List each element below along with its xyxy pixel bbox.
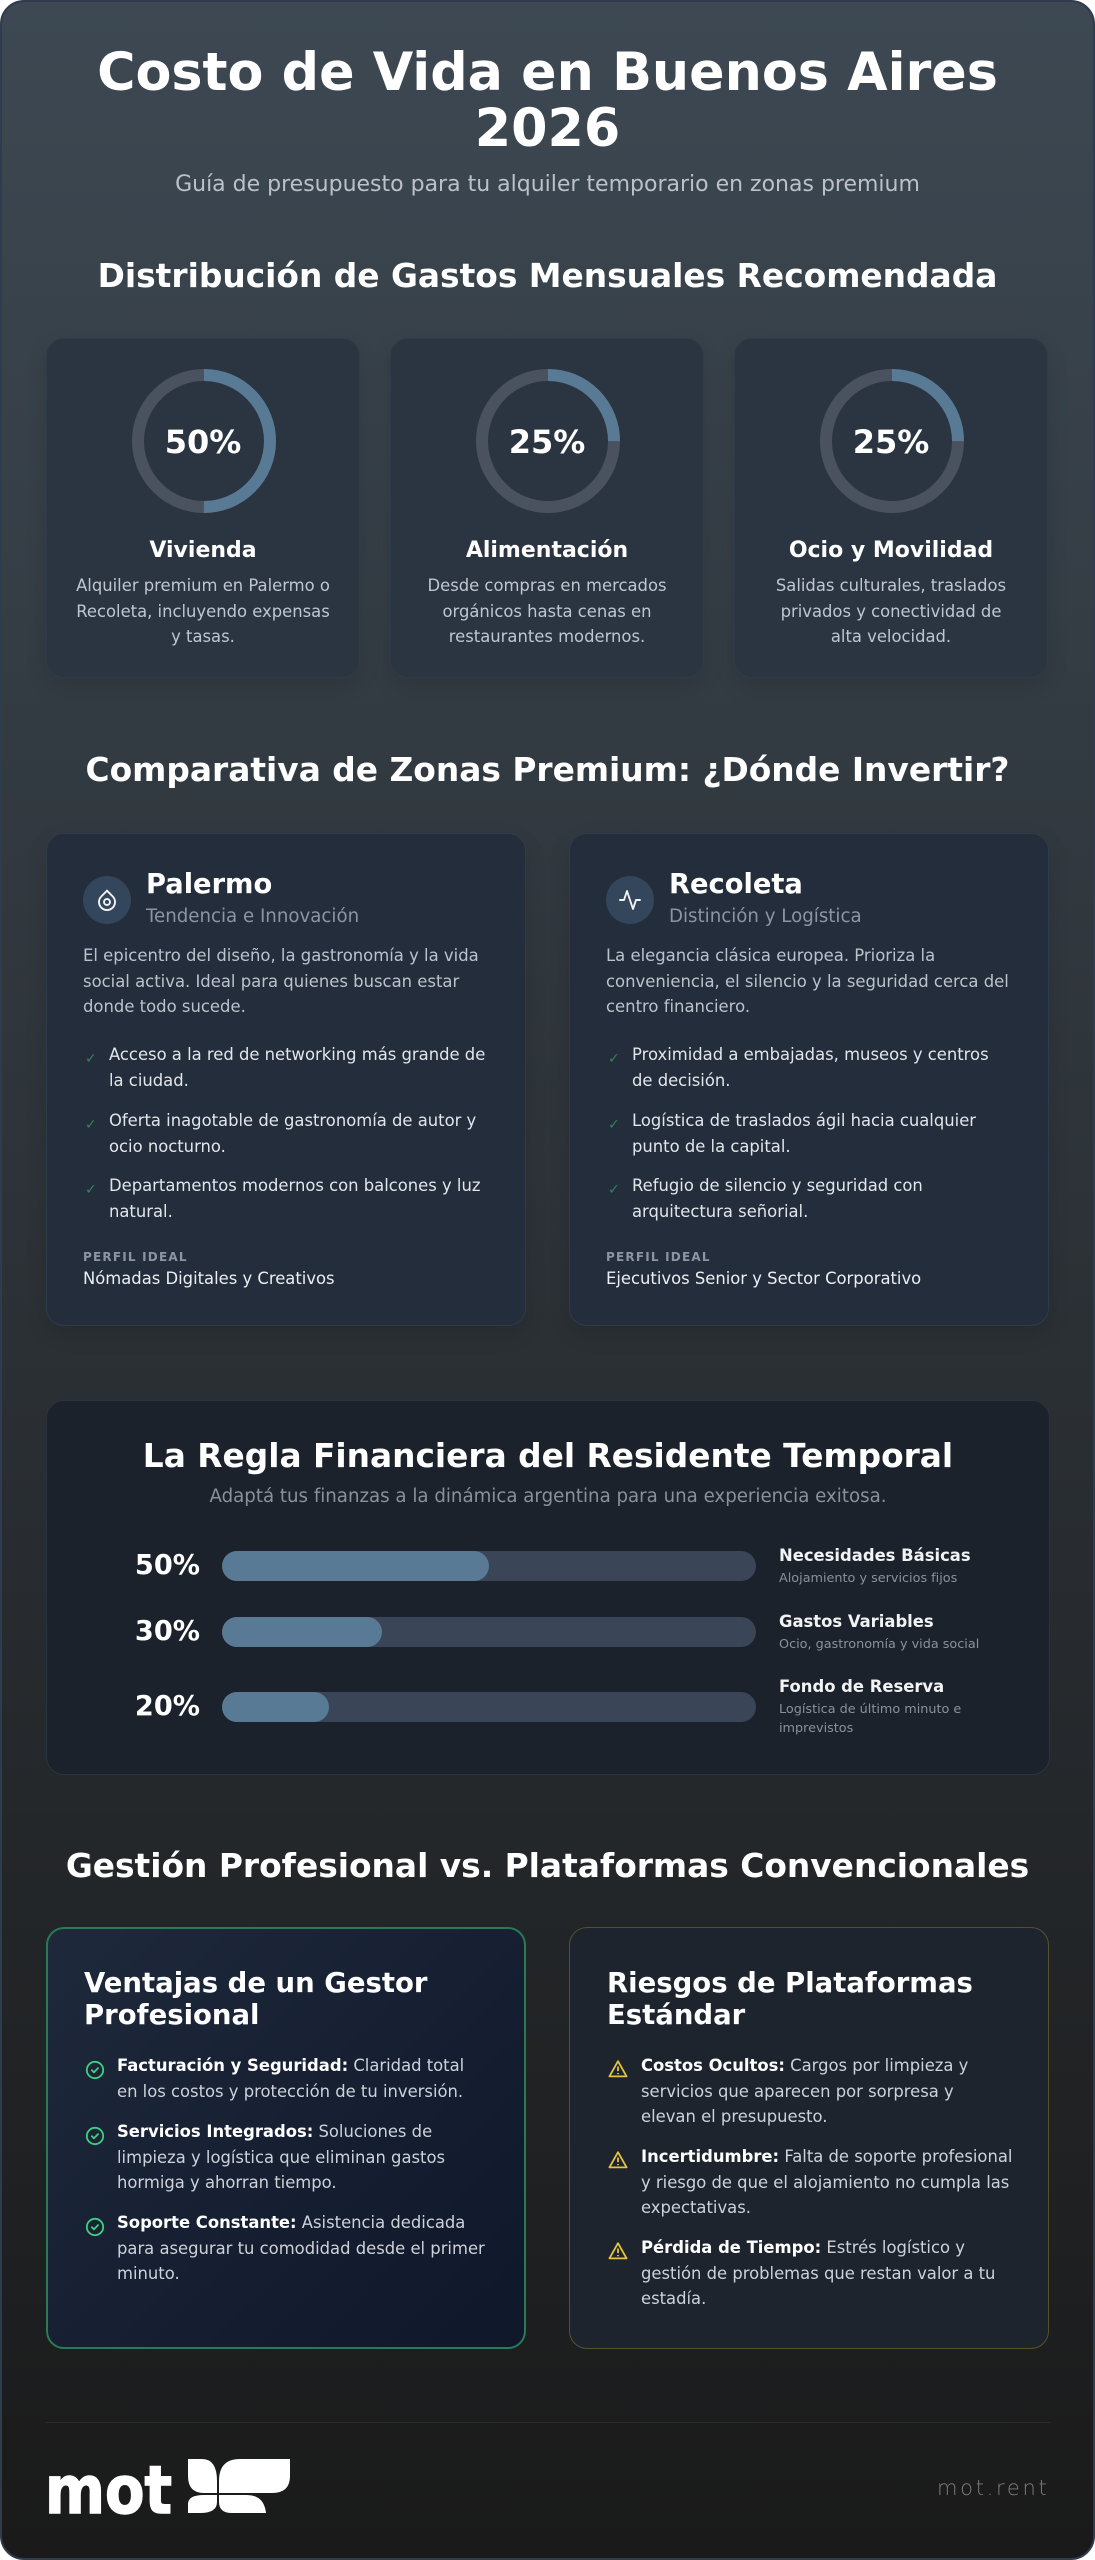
icon: check circle 2 <box>86 2126 104 2146</box>
item: incertidumbre <box>641 2147 1012 2217</box>
zone description <box>606 946 1009 1016</box>
donut chart: 25% <box>820 369 964 513</box>
panel: regla financiera <box>46 1400 1050 1775</box>
value: 25%: 25% <box>853 423 929 461</box>
check item 3: Departamentos modernos con balcones y luz <box>109 1176 480 1195</box>
icon: warning 2 <box>608 2151 628 2168</box>
item: costos ocultos: elevan el presupuesto. <box>641 2107 828 2126</box>
check item 2: Oferta inagotable de gastronomía de autor y <box>109 1111 476 1130</box>
item: soporte: minuto. <box>117 2264 180 2283</box>
bar label: fondo de reserva: Fondo de Reserva <box>779 1677 944 1696</box>
title: 2026 <box>475 98 620 159</box>
panel: ocio y movilidad <box>734 338 1048 678</box>
check item 1 <box>632 1045 989 1090</box>
zone description: centro financiero. <box>606 997 750 1016</box>
card description: privados y conectividad de <box>781 602 1001 621</box>
item: servicios: limpieza y logística que eliminan gastos <box>117 2148 445 2167</box>
ideal profile label: PERFIL IDEAL <box>606 1250 711 1264</box>
ideal profile value: Nómadas Digitales y Creativos <box>83 1269 335 1288</box>
heading: gestión profesional: Gestión Profesional vs. Plataformas Convencionales <box>66 1847 1029 1885</box>
item: facturación <box>117 2056 464 2101</box>
check item 1: Proximidad a embajadas, museos y centros <box>632 1045 989 1064</box>
card description <box>76 576 330 646</box>
zone description: conveniencia, el silencio y la seguridad cerca del <box>606 972 1009 991</box>
panel heading: La Regla Financiera del Residente Temporal <box>143 1437 953 1475</box>
item: incertidumbre: y riesgo de que el alojamiento no cumpla las <box>641 2173 1009 2192</box>
check item 2: punto de la capital. <box>632 1137 791 1156</box>
card description: Alquiler premium en Palermo o <box>76 576 330 595</box>
card description: y tasas. <box>171 627 235 646</box>
panel: ventajas <box>46 1927 526 2349</box>
card description: alta velocidad. <box>831 627 951 646</box>
panel: vivienda <box>46 338 360 678</box>
check item 3: natural. <box>109 1202 173 1221</box>
panel heading <box>607 1967 973 2031</box>
value: 25%: 25% <box>509 423 585 461</box>
check icon 1: ✓ <box>85 1051 97 1067</box>
check item 3 <box>109 1176 480 1221</box>
check item 3: Refugio de silencio y seguridad con <box>632 1176 923 1195</box>
check item 1: la ciudad. <box>109 1071 189 1090</box>
footer url: mot.rent <box>937 2476 1049 2500</box>
check icon 1: ✓ <box>608 1051 620 1067</box>
panel heading: Profesional <box>84 1999 259 2031</box>
zone name: Recoleta <box>669 869 803 900</box>
ideal profile value: Ejecutivos Senior y Sector Corporativo <box>606 1269 921 1288</box>
percent 20: 20% <box>135 1691 200 1722</box>
card description: orgánicos hasta cenas en <box>442 602 652 621</box>
card description: Desde compras en mercados <box>427 576 667 595</box>
item: pérdida de tiempo <box>641 2238 995 2308</box>
card name: Vivienda <box>149 538 257 563</box>
ideal profile label: PERFIL IDEAL <box>83 1250 188 1264</box>
title: Costo de Vida en Buenos Aires <box>97 42 998 103</box>
check item 3: arquitectura señorial. <box>632 1202 808 1221</box>
card description <box>776 576 1006 646</box>
item: pérdida de tiempo: Pérdida de Tiempo: Estrés logístico y <box>641 2238 965 2257</box>
icon: warning 1 <box>608 2060 628 2078</box>
item: servicios <box>117 2122 445 2192</box>
heading: distribución de gastos: Distribución de Gastos Mensuales Recomendada <box>98 257 997 295</box>
check item 2 <box>632 1111 976 1156</box>
icon: check circle 3 <box>86 2218 104 2236</box>
icon: warning 3 <box>608 2242 628 2260</box>
item: costos ocultos: servicios que aparecen por sorpresa y <box>641 2082 954 2101</box>
icon: check circle 1 <box>86 2060 104 2080</box>
bar: 30% <box>222 1617 756 1647</box>
check item 1: Acceso a la red de networking más grande de <box>109 1045 485 1064</box>
panel heading <box>84 1967 428 2031</box>
heading: comparativa de zonas: Comparativa de Zonas Premium: ¿Dónde Invertir? <box>86 751 1009 789</box>
item: incertidumbre: Incertidumbre: Falta de soporte profesional <box>641 2147 1012 2166</box>
check icon 3: ✓ <box>608 1182 620 1198</box>
card description: Salidas culturales, traslados <box>776 576 1006 595</box>
panel: recoleta <box>569 833 1049 1326</box>
percent 50: 50% <box>135 1550 200 1581</box>
bar label: necesidades básicas: Necesidades Básicas <box>779 1546 971 1565</box>
panel: alimentación <box>390 338 704 678</box>
bar note: imprevistos <box>779 1721 853 1736</box>
card description: restaurantes modernos. <box>449 627 645 646</box>
value: 50%: 50% <box>165 423 241 461</box>
item: soporte <box>117 2213 485 2283</box>
item: pérdida de tiempo: gestión de problemas que restan valor a tu <box>641 2264 995 2283</box>
bar label: gastos variables: Gastos Variables <box>779 1612 934 1631</box>
card name: Ocio y Movilidad <box>789 538 993 563</box>
zone description: La elegancia clásica europea. Prioriza la <box>606 946 935 965</box>
zone description: El epicentro del diseño, la gastronomía y la vida <box>83 946 479 965</box>
check item 2: ocio nocturno. <box>109 1137 226 1156</box>
zone description <box>83 946 479 1016</box>
bar: 20% <box>222 1692 756 1722</box>
check item 2 <box>109 1111 476 1156</box>
zone description: social activa. Ideal para quienes buscan estar <box>83 972 459 991</box>
icon: droplet <box>83 876 131 924</box>
panel subtitle: Adaptá tus finanzas a la dinámica argentina para una experiencia exitosa. <box>209 1486 887 1507</box>
icon: activity pulse <box>606 876 654 924</box>
item: servicios: hormiga y ahorran tiempo. <box>117 2173 337 2192</box>
card description: Recoleta, incluyendo expensas <box>76 602 330 621</box>
check icon 2: ✓ <box>85 1117 97 1133</box>
item: costos ocultos <box>641 2056 968 2126</box>
item: soporte: para asegurar tu comodidad desde el primer <box>117 2239 485 2258</box>
item: pérdida de tiempo: estadía. <box>641 2289 706 2308</box>
item: incertidumbre: expectativas. <box>641 2198 751 2217</box>
bar note: Logística de último minuto e <box>779 1702 961 1717</box>
panel: palermo <box>46 833 526 1326</box>
item: facturación: Facturación y Seguridad: Claridad total <box>117 2056 464 2075</box>
zone tagline: Distinción y Logística <box>669 906 862 927</box>
donut chart: 25% <box>476 369 620 513</box>
bar note: Ocio, gastronomía y vida social <box>779 1637 979 1652</box>
percent 30: 30% <box>135 1616 200 1647</box>
subtitle: Guía de presupuesto para tu alquiler temporario en zonas premium <box>175 172 920 197</box>
logo: mot wordmark and mark <box>45 2452 290 2522</box>
zone description: donde todo sucede. <box>83 997 246 1016</box>
donut chart: 50% <box>132 369 276 513</box>
item: facturación: en los costos y protección de tu inversión. <box>117 2082 463 2101</box>
bar note <box>779 1702 961 1736</box>
zone tagline: Tendencia e Innovación <box>146 906 359 927</box>
panel heading: Estándar <box>607 1999 745 2031</box>
check item 1 <box>109 1045 485 1090</box>
item: servicios: Servicios Integrados: Soluciones de <box>117 2122 432 2141</box>
panel heading: Riesgos de Plataformas <box>607 1967 973 1999</box>
check item 1: de decisión. <box>632 1071 730 1090</box>
zone name: Palermo <box>146 869 272 900</box>
check icon 2: ✓ <box>608 1117 620 1133</box>
check icon 3: ✓ <box>85 1182 97 1198</box>
check item 3 <box>632 1176 923 1221</box>
card description <box>427 576 667 646</box>
item: soporte: Soporte Constante: Asistencia dedicada <box>117 2213 465 2232</box>
panel: riesgos <box>569 1927 1049 2349</box>
bar: 50% <box>222 1551 756 1581</box>
panel heading: Ventajas de un Gestor <box>84 1967 427 1999</box>
title <box>97 42 998 159</box>
check item 2: Logística de traslados ágil hacia cualquier <box>632 1111 976 1130</box>
item: costos ocultos: Costos Ocultos: Cargos por limpieza y <box>641 2056 968 2075</box>
bar note: Alojamiento y servicios fijos <box>779 1571 957 1586</box>
card name: Alimentación <box>466 538 628 563</box>
